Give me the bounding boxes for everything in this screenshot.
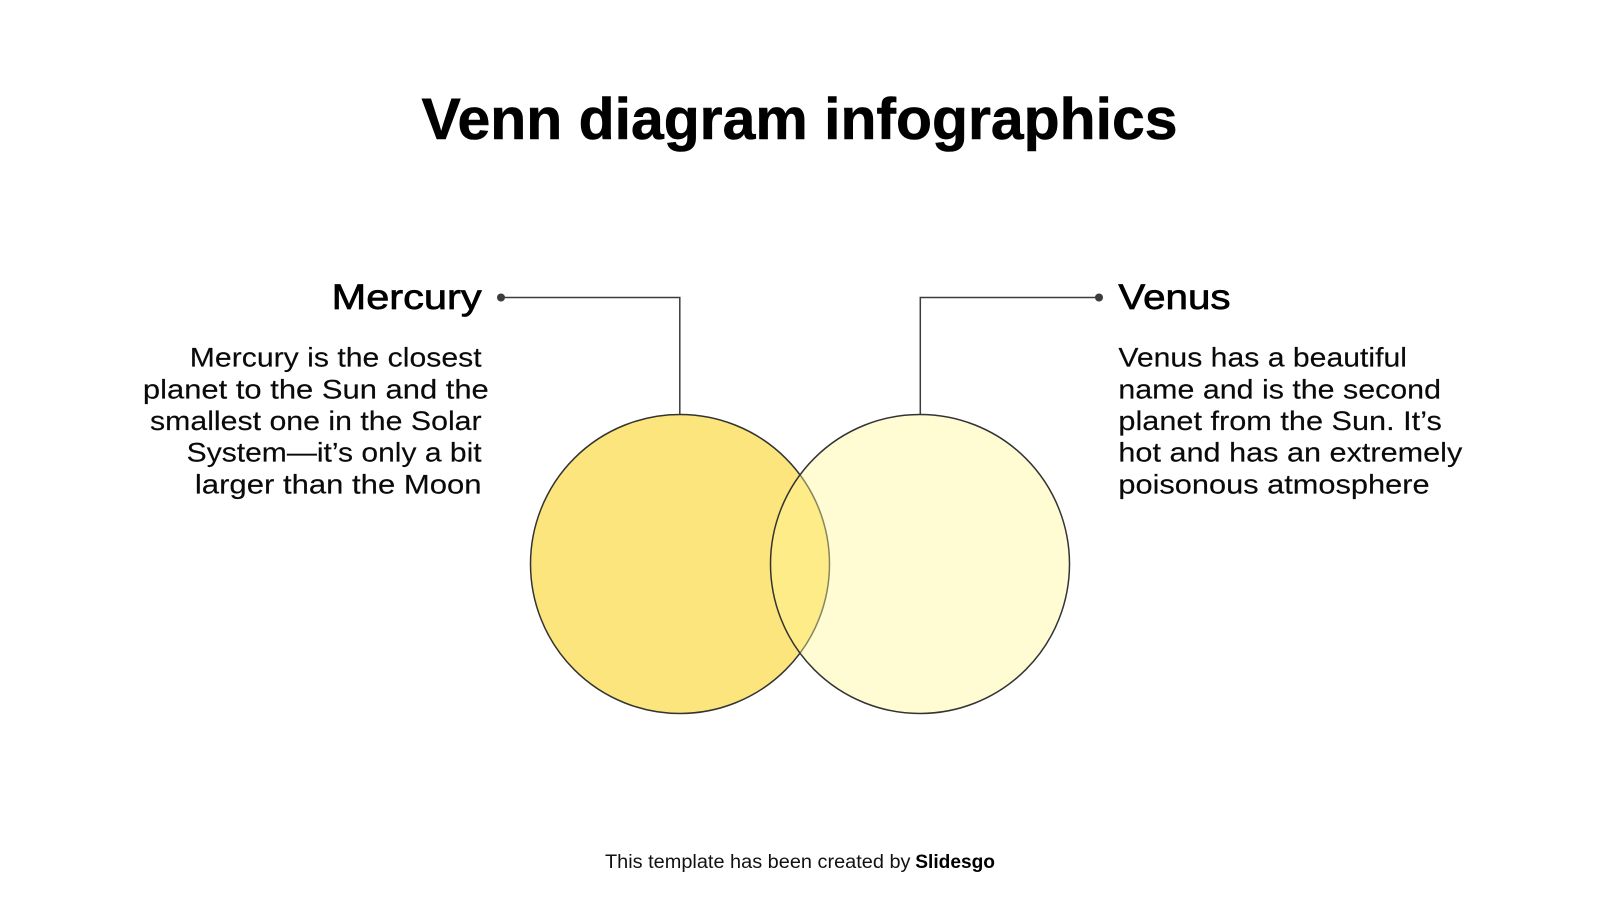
- arrow: Mercury connector: [497, 294, 680, 414]
- footer credit: Slidesgo: [915, 852, 995, 873]
- heading: Venus: Venus: [1118, 278, 1231, 317]
- text block: Mercury description: Mercury is the closest: [190, 343, 482, 373]
- text block: Venus description: planet from the Sun. It’s: [1118, 406, 1442, 436]
- chart: Venn diagram: [530, 414, 1070, 714]
- text block: Venus description: [1118, 343, 1463, 499]
- text block: Venus description: Venus has a beautiful: [1118, 343, 1407, 373]
- title: Venn diagram infographics: [422, 87, 1178, 152]
- panel: Venus text: [1118, 278, 1463, 499]
- text block: Venus description: name and is the second: [1118, 374, 1441, 404]
- footer credit: This template has been created by: [605, 852, 911, 873]
- text block: Venus description: hot and has an extremely: [1118, 438, 1463, 468]
- circle: Venus: [770, 414, 1070, 714]
- text block: Venus description: poisonous atmosphere: [1118, 469, 1430, 499]
- panel: Mercury text: [143, 278, 489, 499]
- text block: Mercury description: [143, 343, 489, 499]
- heading: Mercury: Mercury: [332, 278, 482, 317]
- text block: Mercury description: smallest one in the Solar: [150, 406, 482, 436]
- arrow: Venus connector: [920, 294, 1103, 414]
- text block: Mercury description: larger than the Moon: [195, 469, 482, 499]
- circle outline: Venus: [770, 414, 1070, 714]
- circle: Mercury: [530, 414, 830, 714]
- text block: Mercury description: System—it’s only a bit: [187, 438, 482, 468]
- text block: Mercury description: planet to the Sun and the: [143, 374, 489, 404]
